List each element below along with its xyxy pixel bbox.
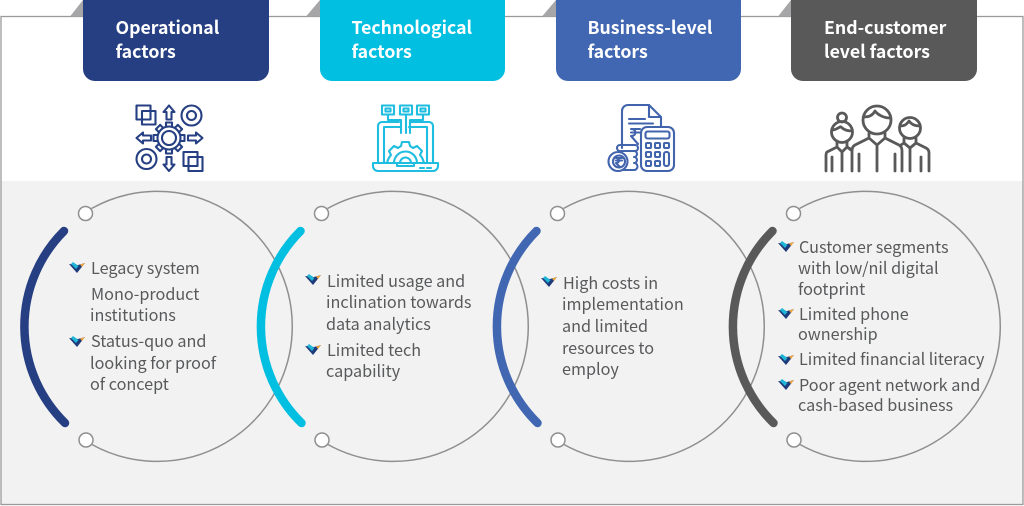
text: operational list: Legacy system <box>91 255 200 279</box>
tab: Business-level factors <box>542 0 741 81</box>
text: business list: employ <box>562 356 619 380</box>
tab: Business-level factors: factors <box>588 38 648 64</box>
text: end-customer list: Limited financial literacy <box>799 346 985 370</box>
text: end-customer list: footprint <box>798 276 865 300</box>
text: business list: and limited <box>562 313 648 337</box>
text: technological list: Limited tech <box>327 337 421 361</box>
tab: Operational factors <box>70 0 269 81</box>
text: operational list: Mono-product <box>91 281 199 305</box>
text: end-customer list: cash-based business <box>798 392 953 416</box>
arc: cyan <box>261 231 302 423</box>
text: business list: implementation <box>562 291 684 315</box>
text: operational list: Status-quo and <box>91 328 206 352</box>
text: end-customer list: Poor agent network and <box>799 372 980 396</box>
text: technological list <box>305 268 471 382</box>
text: operational list <box>69 255 217 395</box>
circle outline 1 <box>78 191 292 461</box>
icon: invoice, calculator and coins <box>608 105 674 171</box>
circle outline 2 <box>314 191 528 461</box>
arc: navy <box>24 231 65 423</box>
text: technological list: inclination towards <box>326 289 471 313</box>
circle outline 4 <box>786 191 1000 461</box>
text: business list <box>541 270 684 380</box>
tab: End-customer level factors: End-customer <box>824 14 947 40</box>
icon: laptop with gear and data nodes <box>373 106 438 171</box>
icon: operations gear with arrows <box>136 106 202 171</box>
text: end-customer list: ownership <box>798 321 878 345</box>
text: operational list: of concept <box>90 371 169 395</box>
arc: blue <box>497 231 538 423</box>
icon: group of three people <box>826 106 929 171</box>
text: end-customer list: Limited phone <box>799 301 909 325</box>
tab: Operational factors: Operational <box>116 14 220 40</box>
tab: Business-level factors: Business-level <box>588 14 713 40</box>
tab: Technological factors: Technological <box>352 14 473 40</box>
text: technological list: capability <box>326 358 401 382</box>
grey lower panel <box>1 181 1023 505</box>
text: technological list: Limited usage and <box>327 268 465 292</box>
text: end-customer list <box>778 234 985 416</box>
tab: Technological factors <box>306 0 505 81</box>
tab: Technological factors: factors <box>352 38 412 64</box>
arc: dark grey <box>733 231 774 423</box>
circle outline 3 <box>550 191 764 461</box>
text: business list: High costs in <box>563 270 658 294</box>
text: operational list: institutions <box>90 302 176 326</box>
text: end-customer list: Customer segments <box>799 234 949 258</box>
text: end-customer list: with low/nil digital <box>798 255 939 279</box>
text: business list: resources to <box>562 335 654 359</box>
tab: Operational factors: factors <box>116 38 176 64</box>
text: technological list: data analytics <box>326 311 431 335</box>
text: operational list: looking for proof <box>90 350 217 374</box>
tab: End-customer level factors <box>778 0 977 81</box>
tab: End-customer level factors: level factors <box>824 38 930 64</box>
